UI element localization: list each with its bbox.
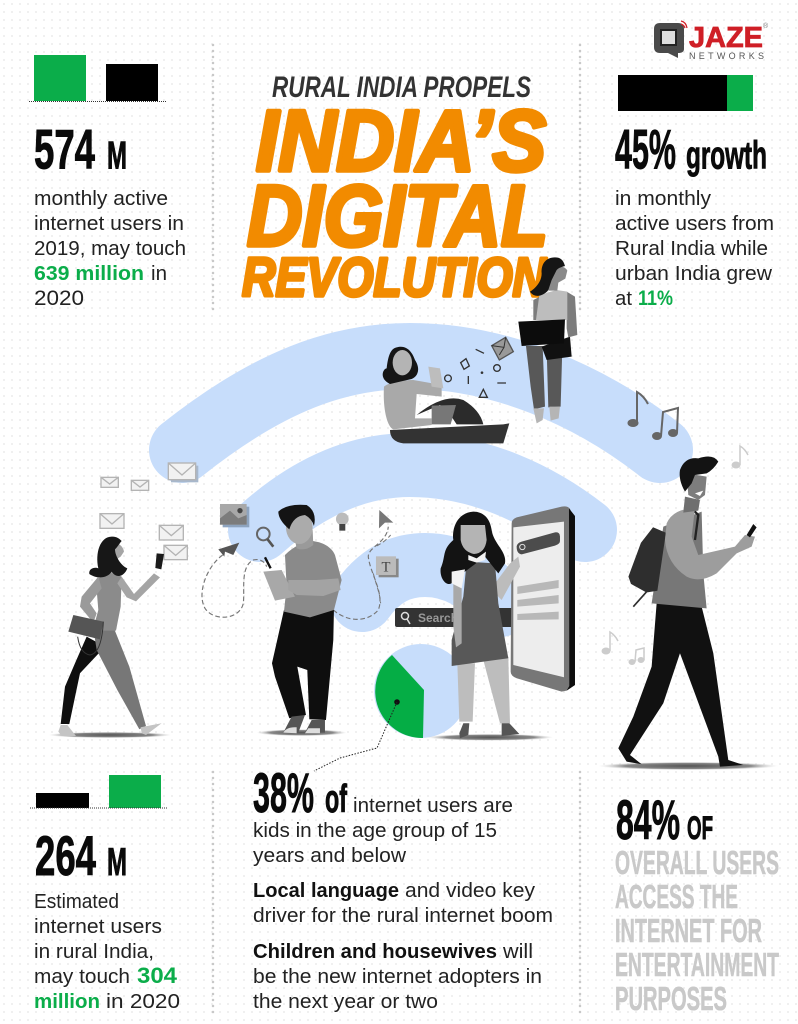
pie chart: 38 percent kids	[314, 644, 468, 771]
illustration: girl with phone, man with backpack	[427, 456, 778, 770]
text: children and housewives: be the new internet adopters in	[253, 966, 542, 988]
text: children and housewives: the next year or two	[253, 991, 438, 1013]
panel: 38% kids and adopters	[253, 761, 553, 1013]
text: rural users description	[34, 891, 180, 1013]
shadows	[427, 734, 778, 770]
dashed paths	[202, 527, 391, 619]
search bar: Search	[418, 611, 458, 625]
standing woman	[518, 257, 577, 423]
panel: 84% entertainment	[615, 788, 779, 1017]
web icons	[218, 504, 399, 577]
logo: Jaze Networks: JAZE	[689, 22, 763, 54]
text: growth description: at	[615, 288, 632, 310]
text: local language	[253, 880, 553, 927]
text: kids description: internet users are	[353, 795, 513, 817]
text: growth description: in monthly	[615, 188, 711, 210]
text: kids description: kids in the age group of 15	[253, 820, 497, 842]
text: entertainment description: PURPOSES	[615, 980, 727, 1017]
shadows	[48, 729, 347, 738]
text: children and housewives	[253, 941, 542, 1013]
illustration: seated woman and standing woman	[383, 257, 577, 443]
text: growth description: 11%	[638, 287, 673, 310]
text: growth description	[615, 188, 774, 310]
panel: 45% growth	[615, 75, 774, 310]
panel: 574 M monthly active users	[29, 55, 186, 310]
text: local language: Local language	[253, 880, 399, 902]
girl	[441, 512, 520, 738]
stat: 264 M: M	[107, 841, 127, 884]
logo: Jaze Networks: NETWORKS	[689, 51, 764, 61]
music notes	[602, 392, 748, 664]
stat: 574 M: 574	[34, 118, 95, 180]
text: monthly active description	[34, 188, 186, 310]
headline line 1: INDIA’S	[256, 94, 546, 190]
text: kids description: years and below	[253, 845, 407, 867]
text: local language: and video key	[405, 880, 535, 902]
light notes	[602, 446, 748, 664]
seated woman	[383, 347, 509, 443]
text: entertainment description	[615, 844, 779, 1017]
illustration: woman with phone, man with tablet	[48, 463, 399, 738]
headline line 3: REVOLUTION	[242, 246, 547, 308]
logo: Jaze Networks: ®	[763, 22, 769, 30]
stat: 84% OF: 84%	[616, 788, 680, 851]
panel: 264 M rural users	[30, 775, 180, 1013]
text: local language: driver for the rural internet boom	[253, 905, 553, 927]
text: rural users description: internet users	[34, 916, 162, 938]
text: kids description	[253, 795, 513, 867]
text: monthly active description: 2019, may touch	[34, 238, 186, 260]
bar pair: 574M	[29, 55, 166, 102]
text: rural users description: Estimated	[34, 891, 119, 913]
dark notes	[628, 392, 678, 440]
subtitle: RURAL INDIA PROPELS	[272, 71, 531, 104]
text: growth description: urban India grew	[615, 263, 773, 285]
stat: 264 M: 264	[35, 824, 96, 887]
text: children and housewives: Children and housewives	[253, 941, 497, 963]
text: monthly active description: 639 million	[34, 263, 144, 285]
giant phone	[511, 506, 575, 692]
stat: 38% of: 38%	[253, 761, 314, 824]
stat: 84% OF: OF	[687, 810, 713, 846]
floating shapes	[445, 337, 513, 397]
wifi arcs background	[182, 356, 660, 605]
text: growth description: active users from	[615, 213, 774, 235]
stacked bar	[618, 75, 753, 111]
man with backpack	[618, 456, 757, 767]
man with tablet	[263, 505, 342, 733]
envelopes	[100, 463, 198, 560]
walking woman	[58, 537, 164, 736]
text: monthly active description: in	[151, 263, 167, 285]
text: rural users description: million	[34, 991, 100, 1013]
search bar	[395, 608, 513, 627]
web icons: T	[381, 559, 390, 575]
text: rural users description: may touch	[34, 966, 130, 988]
stat: 38% of: of	[325, 778, 348, 821]
bar pair: 264M	[30, 775, 168, 808]
text: monthly active description: 2020	[34, 287, 84, 310]
text: children and housewives: will	[502, 941, 533, 963]
headline line 2: DIGITAL	[247, 168, 548, 264]
stat: 45% growth: 45%	[615, 118, 676, 180]
title	[242, 71, 548, 308]
text: monthly active description: internet users in	[34, 213, 184, 235]
text: monthly active description: monthly active	[34, 188, 168, 210]
stat: 574 M: M	[107, 134, 127, 178]
text: rural users description: in rural India,	[34, 941, 154, 963]
text: rural users description: in 2020	[106, 991, 180, 1013]
text: rural users description: 304	[137, 963, 178, 988]
text: growth description: Rural India while	[615, 238, 768, 260]
logo: Jaze Networks	[654, 21, 769, 61]
